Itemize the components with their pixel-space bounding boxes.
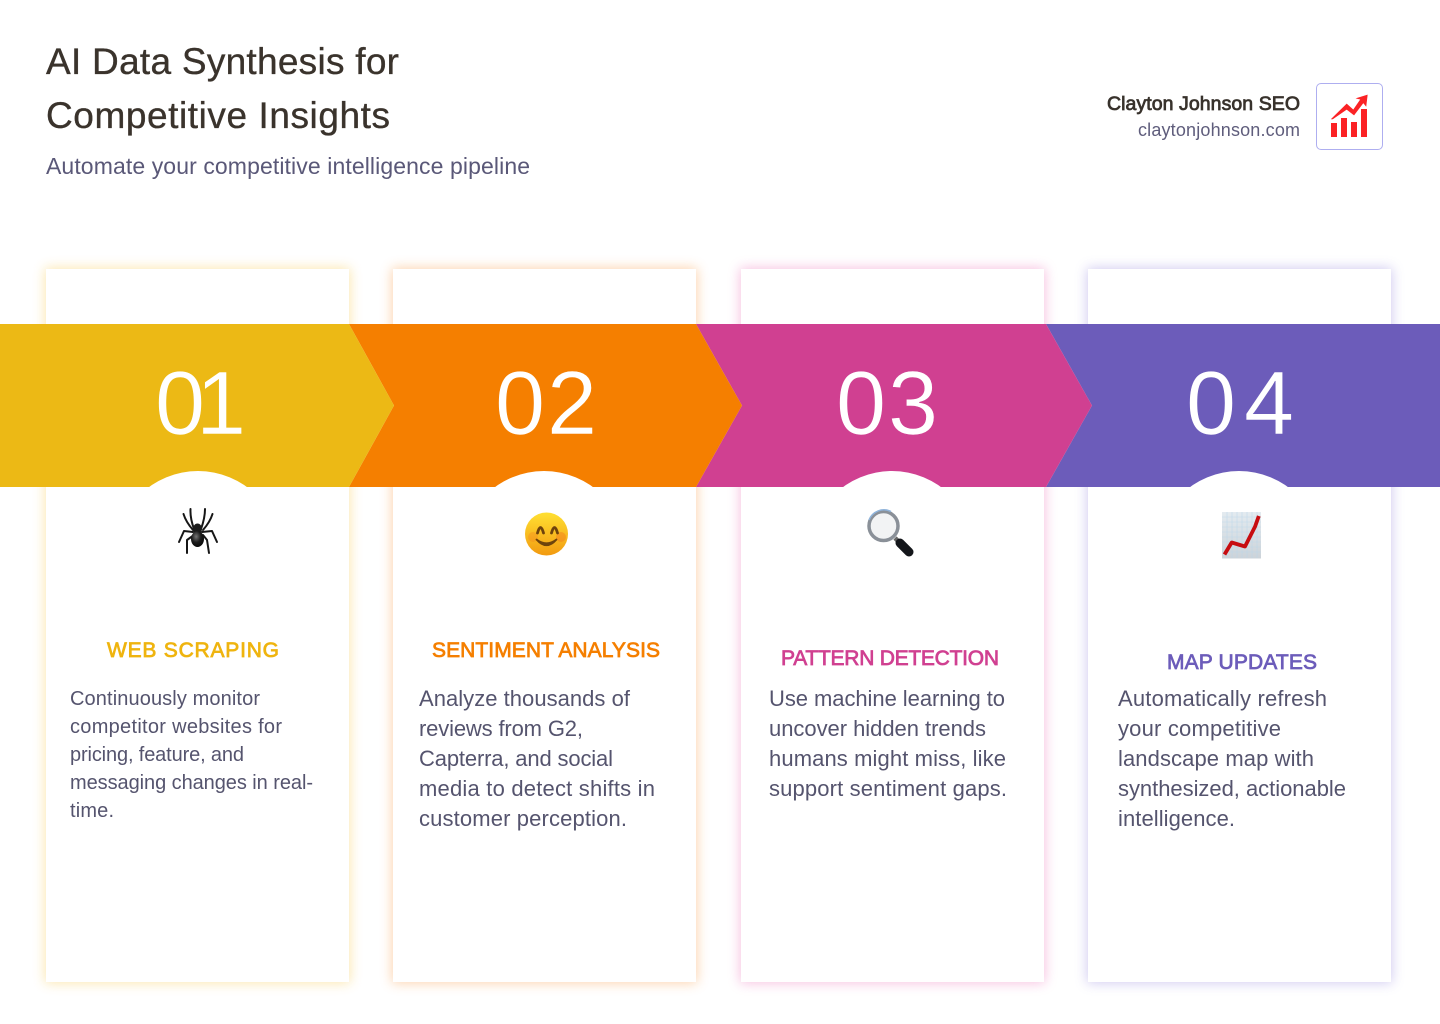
panel text: map updates: [1118, 651, 1346, 831]
heading: web scraping: WEB SCRAPING: [107, 639, 279, 662]
description: map updates: intelligence.: [1118, 806, 1235, 831]
brand name and url: claytonjohnson.com: [1138, 120, 1300, 140]
title: Competitive Insights: [46, 95, 390, 136]
description: web scraping: time.: [70, 800, 114, 822]
number 03: 03: [836, 354, 938, 454]
subtitle: Automate your competitive intelligence pipeline: [46, 153, 530, 179]
panel: web scraping card: [46, 269, 349, 982]
panel text: web scraping: [70, 639, 313, 822]
panel glows: [45, 268, 1392, 983]
icon: smiling face: [525, 512, 568, 556]
description: pattern detection: uncover hidden trends: [769, 716, 986, 741]
brand name and url: [1107, 93, 1300, 140]
icon: magnifying glass: [869, 510, 909, 552]
description: map updates: landscape map with: [1118, 746, 1314, 771]
description: pattern detection: support sentiment gaps.: [769, 776, 1007, 801]
number 01: 01: [155, 354, 246, 454]
number 04: 04: [1186, 354, 1294, 454]
title: AI Data Synthesis for: [46, 41, 399, 82]
description: sentiment analysis: Analyze thousands of: [419, 686, 631, 711]
heading: map updates: MAP UPDATES: [1167, 651, 1317, 674]
description: web scraping: [70, 688, 313, 822]
heading: sentiment analysis: SENTIMENT ANALYSIS: [432, 639, 660, 662]
description: web scraping: Continuously monitor: [70, 688, 260, 710]
description: map updates: [1118, 686, 1346, 831]
icon: brand logo: [1316, 84, 1382, 150]
arrow: step 3 band: [696, 324, 1092, 487]
title: [46, 41, 399, 136]
description: map updates: synthesized, actionable: [1118, 776, 1346, 801]
description: sentiment analysis: media to detect shifts in: [419, 776, 655, 801]
description: sentiment analysis: Capterra, and social: [419, 746, 613, 771]
icon notches: [115, 471, 1322, 637]
description: web scraping: competitor websites for: [70, 716, 282, 738]
panel: map updates card: [1088, 269, 1391, 982]
description: web scraping: messaging changes in real-: [70, 772, 313, 794]
heading: pattern detection: PATTERN DETECTION: [781, 647, 999, 670]
brand name and url: Clayton Johnson SEO: [1107, 93, 1300, 115]
description: map updates: your competitive: [1118, 716, 1281, 741]
description: pattern detection: humans might miss, like: [769, 746, 1006, 771]
panel: pattern detection card: [741, 269, 1044, 982]
panel: sentiment analysis card: [393, 269, 696, 982]
description: sentiment analysis: [419, 686, 655, 831]
icon: chart increasing: [1222, 512, 1261, 558]
arrow: step 1 band: [0, 324, 394, 487]
arrow: step 4 band: [1046, 324, 1440, 487]
description: pattern detection: Use machine learning to: [769, 686, 1005, 711]
arrow: step 2 band: [349, 324, 742, 487]
icon: spider: [179, 509, 217, 553]
description: web scraping: pricing, feature, and: [70, 744, 244, 766]
description: sentiment analysis: reviews from G2,: [419, 716, 583, 741]
panel text: sentiment analysis: [419, 639, 660, 831]
description: sentiment analysis: customer perception.: [419, 806, 627, 831]
description: pattern detection: [769, 686, 1007, 801]
description: map updates: Automatically refresh: [1118, 686, 1327, 711]
panel text: pattern detection: [769, 647, 1007, 801]
number 02: 02: [495, 354, 597, 454]
